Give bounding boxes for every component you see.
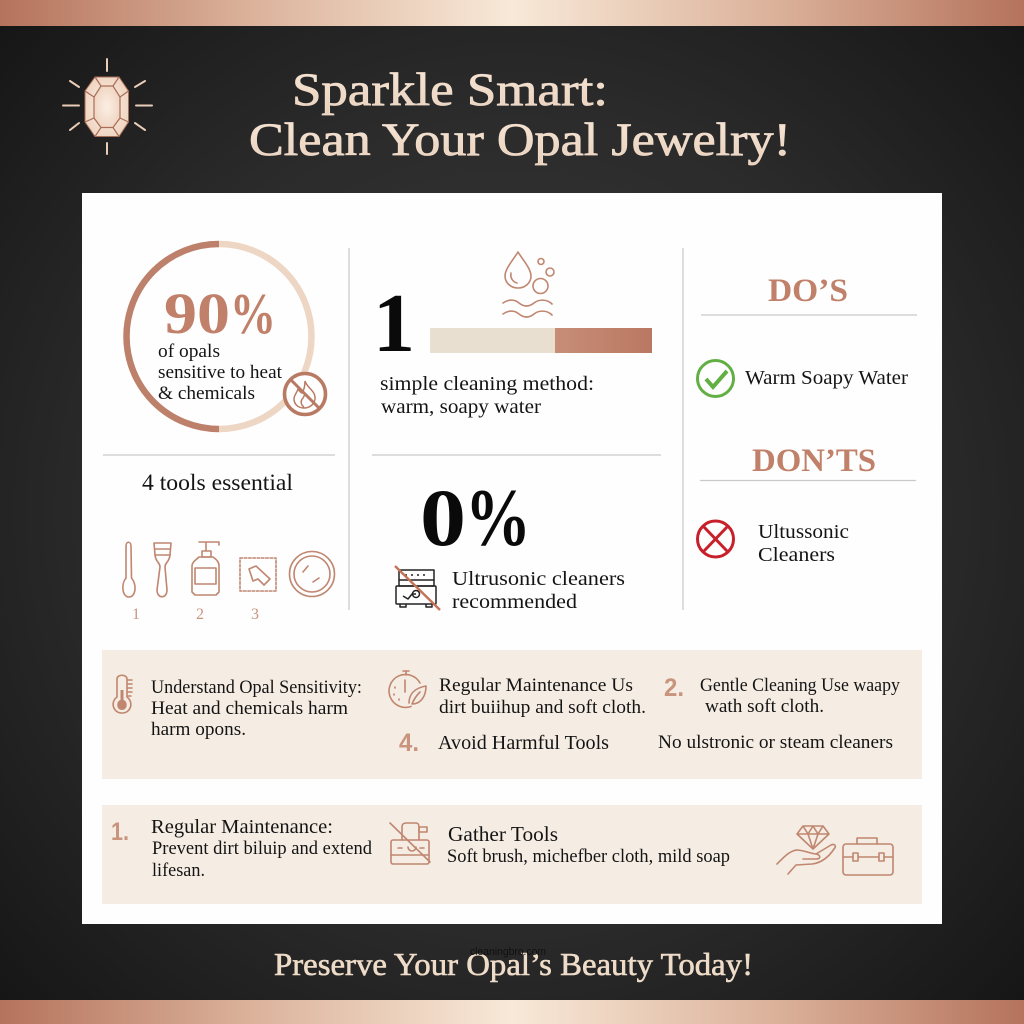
icon: microfiber cloth [240,558,276,591]
tip: understand opal sensitivity [151,678,362,740]
0% figure: % [465,472,531,563]
title: Clean Your Opal Jewelry! [249,114,791,166]
ultrasonic caption: recommended [452,591,577,613]
panel: tools essential [123,470,334,623]
tool numbers: 2 [196,606,204,623]
tip: regular maintenance lifespan: Prevent dirt biluip and extend [152,839,373,859]
tip: gather tools: Gather Tools [448,822,558,846]
90% caption: & chemicals [158,384,255,404]
number 2: 2. [664,674,684,702]
upper panel background [102,650,922,779]
watermark: cleaningbro.com [470,946,546,958]
tool numbers: 3 [251,606,259,623]
method caption [380,373,594,418]
tip: gentle cleaning: wath soft cloth. [705,697,824,717]
0% figure [420,472,531,563]
90% caption: of opals [158,342,220,362]
number 4: 4. [399,729,419,757]
tip: gather tools: Soft brush, michefber cloth, mild soap [447,847,730,867]
progress bar [430,328,652,353]
icon: thermometer [113,675,132,713]
icon: polished round dish [290,552,334,596]
icon: toolbox case [843,838,893,875]
icon: crossed-out ultrasonic cleaner [395,566,440,610]
icon: cotton swab [123,542,135,597]
90% figure: 90 [164,281,230,346]
90% figure: % [230,281,276,346]
tip: understand opal sensitivity: Understand Opal Sensitivity: [151,678,362,698]
tip: regular maintenance: dirt buiihup and soft cloth. [439,698,646,718]
tool numbers [132,606,259,623]
ultrasonic caption [452,568,625,613]
icon: stopwatch with leaf [389,671,426,707]
title [249,64,791,166]
panel: upper beige tips [102,650,922,779]
tip: understand opal sensitivity: Heat and chemicals harm [151,699,349,719]
tip: regular maintenance: Regular Maintenance Us [439,676,633,696]
tip: gentle cleaning: Gentle Cleaning Use waapy [700,676,901,696]
icon: soap bottle [192,542,219,595]
tip: regular maintenance lifespan [151,816,373,881]
0% figure: 0 [420,472,466,563]
tip: gather tools [447,822,730,867]
panel: 90% statistic [126,244,326,429]
ultrasonic caption: Ultrusonic cleaners [452,568,625,590]
big number 1: 1 [373,277,415,370]
icon: red cross [698,521,734,557]
panel: lower beige tips [102,805,922,904]
icon: brush [154,543,171,597]
icon: sparkling opal gem [63,59,152,154]
do's heading: DO’S [768,273,848,309]
don't item: Cleaners [758,544,835,566]
donut ring chart [126,244,312,429]
bottom gradient bar [0,1000,1024,1024]
tools heading: 4 tools essential [142,470,293,495]
title: Sparkle Smart: [292,64,608,116]
tip: understand opal sensitivity: harm opons. [151,720,246,740]
top gradient bar [0,0,1024,26]
90% caption [158,342,283,404]
column dividers [103,248,917,610]
panel: zero percent ultrasonic [395,472,625,613]
panel: one cleaning method [373,252,652,418]
tool numbers: 1 [132,606,140,623]
do item: Warm Soapy Water [745,367,908,389]
icon: water drop and bubbles [503,252,554,317]
tip: regular maintenance [439,676,646,718]
don'ts heading: DON’TS [752,443,876,479]
panel: white content card [82,193,942,924]
90% caption: sensitive to heat [158,363,283,383]
method caption: warm, soapy water [381,396,541,418]
footer tagline: Preserve Your Opal’s Beauty Today! [274,946,753,982]
90% figure [164,281,276,346]
don't item: Ultussonic [758,521,849,543]
tip: gentle cleaning [700,676,901,717]
icon: hand holding diamond [777,826,835,874]
panel: do's and don'ts [698,273,908,566]
tip: regular maintenance lifespan: lifesan. [152,861,205,881]
tip: no ultrasonic or steam: No ulstronic or steam cleaners [658,733,893,753]
number 1: 1. [111,818,129,846]
tip: regular maintenance lifespan: Regular Maintenance: [151,816,333,838]
don't item [758,521,849,566]
icon: no flame [284,374,326,414]
icon: crossed-out tools [390,823,430,864]
lower panel background [102,805,922,904]
method caption: simple cleaning method: [380,373,594,395]
tip: avoid harmful tools: Avoid Harmful Tools [438,732,609,754]
icon: green check [698,360,734,396]
